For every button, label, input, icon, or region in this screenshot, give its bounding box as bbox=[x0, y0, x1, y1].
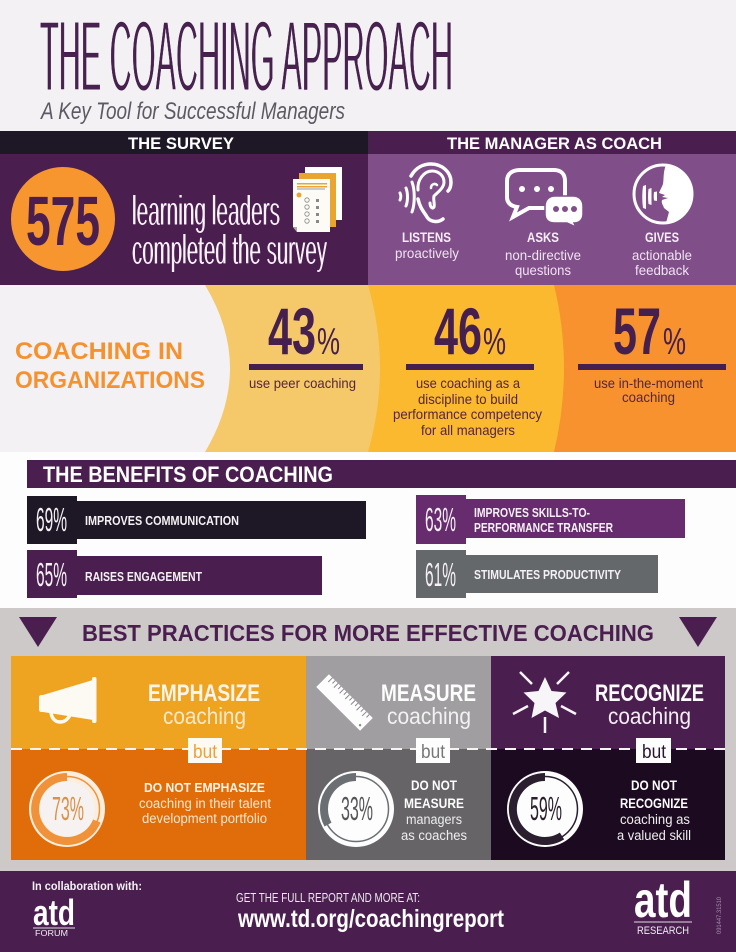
logo: atd research: atd bbox=[634, 872, 692, 928]
text: recognize coaching: RECOGNIZE bbox=[595, 680, 704, 707]
bar: 69% improves communication bbox=[27, 496, 366, 544]
survey text: learning leaders bbox=[132, 187, 280, 234]
stat: 43%: use peer coaching bbox=[249, 375, 356, 391]
icon: ruler bbox=[316, 674, 373, 731]
label: gives: feedback bbox=[635, 262, 690, 278]
gauge: 73% bbox=[29, 771, 105, 847]
text: get the full report: GET THE FULL REPORT AND MORE AT: bbox=[236, 890, 420, 905]
text: document code: 091447.31510 bbox=[717, 896, 723, 934]
bar: 61% stimulates productivity: STIMULATES PRODUCTIVITY bbox=[474, 567, 621, 582]
text: report url: www.td.org/coachingreport bbox=[237, 905, 505, 933]
stat: 43% bbox=[249, 294, 363, 391]
stat: 46%: discipline to build bbox=[418, 391, 518, 407]
stat: 43%: 43 bbox=[268, 294, 316, 368]
logo: atd forum: FORUM bbox=[35, 929, 68, 938]
gauge: 59%: 59% bbox=[530, 790, 562, 827]
label: listens: LISTENS bbox=[402, 229, 451, 245]
bar: 61% stimulates productivity bbox=[416, 550, 658, 598]
heading: the survey: THE SURVEY bbox=[128, 134, 235, 153]
gauge: 59% bbox=[507, 771, 583, 847]
gauge: 33% bbox=[318, 771, 394, 847]
text: do not measure: MEASURE bbox=[404, 796, 464, 811]
heading: the manager as coach: THE MANAGER AS COACH bbox=[447, 134, 662, 153]
bar: 63% improves skills-to-performance transfer: IMPROVES SKILLS-TO- bbox=[474, 505, 590, 520]
badge: 575: 575 bbox=[26, 182, 100, 260]
text: do not measure: as coaches bbox=[401, 828, 467, 843]
panel: best practices bbox=[0, 608, 736, 871]
label: asks: questions bbox=[515, 262, 571, 278]
text: in collaboration with: In collaboration with: bbox=[32, 879, 142, 893]
stat: 57%: % bbox=[663, 321, 686, 363]
heading: best practices: BEST PRACTICES FOR MORE EFFECTIVE COACHING bbox=[82, 620, 654, 646]
stat: 43%: % bbox=[317, 321, 340, 363]
card: recognize bbox=[491, 656, 725, 860]
text: do not recognize: RECOGNIZE bbox=[620, 796, 688, 811]
heading: coaching in organizations: ORGANIZATIONS bbox=[15, 367, 205, 394]
bar: 69% improves communication: 69% bbox=[36, 501, 67, 538]
bar: 61% stimulates productivity: 61% bbox=[425, 556, 456, 593]
badge: 575 bbox=[11, 167, 115, 271]
stat: 57%: 57 bbox=[613, 294, 661, 368]
stat: 57%: use in-the-moment bbox=[594, 375, 703, 391]
gauge: 33%: 33% bbox=[341, 790, 373, 827]
stat: 57% bbox=[578, 294, 726, 405]
label: listens: proactively bbox=[395, 245, 459, 261]
but tag: emphasize: but bbox=[193, 742, 218, 763]
text: do not emphasize: DO NOT EMPHASIZE bbox=[144, 780, 265, 795]
panel: the survey: completed the survey bbox=[132, 226, 327, 273]
heading: the benefits of coaching bbox=[27, 460, 736, 488]
but tag: measure bbox=[416, 738, 450, 763]
bar: 69% improves communication: IMPROVES COMMUNICATION bbox=[85, 513, 239, 528]
icon: ear bbox=[400, 164, 451, 221]
heading: the benefits of coaching: THE BENEFITS OF COACHING bbox=[43, 462, 333, 487]
gauge: 73%: 73% bbox=[52, 790, 84, 827]
text: measure coaching bbox=[381, 680, 476, 729]
stat: 46%: % bbox=[483, 321, 506, 363]
label: gives: actionable bbox=[632, 247, 692, 263]
survey text bbox=[132, 187, 327, 273]
stat: 46%: use coaching as a bbox=[416, 375, 520, 391]
panel: footer bbox=[0, 871, 736, 952]
text: recognize coaching bbox=[595, 680, 704, 729]
text: do not recognize: DO NOT bbox=[631, 778, 678, 793]
stat: 46%: for all managers bbox=[421, 422, 515, 438]
white band: benefits background bbox=[0, 452, 736, 608]
text: emphasize coaching: EMPHASIZE bbox=[148, 680, 260, 707]
bar: 63% improves skills-to-performance transfer bbox=[416, 495, 685, 544]
card: measure bbox=[306, 656, 491, 860]
but tag: emphasize bbox=[188, 738, 222, 763]
text: do not recognize: coaching as bbox=[620, 812, 690, 827]
label: gives bbox=[632, 229, 692, 278]
but tag: measure: but bbox=[421, 742, 446, 763]
text: do not emphasize: coaching in their talent bbox=[139, 796, 271, 811]
bar: 63% improves skills-to-performance transfer: PERFORMANCE TRANSFER bbox=[474, 520, 613, 535]
bar: 65% raises engagement bbox=[27, 550, 322, 598]
heading: coaching in organizations: COACHING IN bbox=[15, 338, 183, 365]
label: gives: GIVES bbox=[645, 229, 679, 245]
logo: atd research bbox=[634, 872, 692, 937]
text: measure coaching: MEASURE bbox=[381, 680, 476, 707]
label: asks: ASKS bbox=[527, 229, 559, 245]
but tag: recognize bbox=[636, 738, 671, 763]
text: measure coaching: coaching bbox=[387, 703, 471, 729]
text: do not measure bbox=[401, 778, 467, 843]
label: listens bbox=[395, 229, 459, 261]
text: do not measure: DO NOT bbox=[411, 778, 458, 793]
icon: survey documents bbox=[293, 167, 342, 232]
card: emphasize bbox=[11, 656, 306, 860]
stat: 46%: 46 bbox=[434, 294, 482, 368]
label: asks bbox=[505, 229, 581, 278]
panel: the manager as coach bbox=[368, 131, 736, 285]
heading: coaching in organizations bbox=[15, 338, 205, 394]
panel: the survey bbox=[0, 131, 368, 285]
stat: 46%: performance competency bbox=[393, 406, 542, 422]
icon: star with rays bbox=[513, 672, 576, 733]
text: recognize coaching: coaching bbox=[608, 703, 691, 729]
icon: speaking face bbox=[634, 165, 692, 223]
icon: megaphone bbox=[39, 677, 96, 723]
subtitle: A Key Tool for Successful Managers bbox=[39, 98, 345, 125]
label: asks: non-directive bbox=[505, 247, 581, 263]
icon: speech bubbles bbox=[507, 170, 583, 227]
text: do not emphasize bbox=[139, 780, 271, 826]
bar: 63% improves skills-to-performance transfer: 63% bbox=[425, 501, 456, 538]
panel: coaching in organizations bbox=[15, 285, 736, 452]
logo: atd forum: atd bbox=[33, 892, 75, 933]
but tag: recognize: but bbox=[642, 742, 667, 763]
bar: 65% raises engagement: 65% bbox=[36, 556, 67, 593]
text: do not emphasize: development portfolio bbox=[142, 811, 267, 826]
text: do not recognize: a valued skill bbox=[617, 828, 691, 843]
arrow: left triangle bbox=[19, 617, 57, 647]
bar: 65% raises engagement: RAISES ENGAGEMENT bbox=[85, 569, 202, 584]
stat: 57%: coaching bbox=[622, 389, 675, 405]
text: emphasize coaching: coaching bbox=[163, 703, 246, 729]
stat: 46% bbox=[393, 294, 542, 438]
logo: atd research: RESEARCH bbox=[637, 925, 689, 937]
arrow: right triangle bbox=[679, 617, 717, 647]
text: do not recognize bbox=[617, 778, 691, 843]
panel: the benefits of coaching bbox=[27, 460, 736, 598]
text: do not measure: managers bbox=[406, 812, 462, 827]
text: emphasize coaching bbox=[148, 680, 260, 729]
